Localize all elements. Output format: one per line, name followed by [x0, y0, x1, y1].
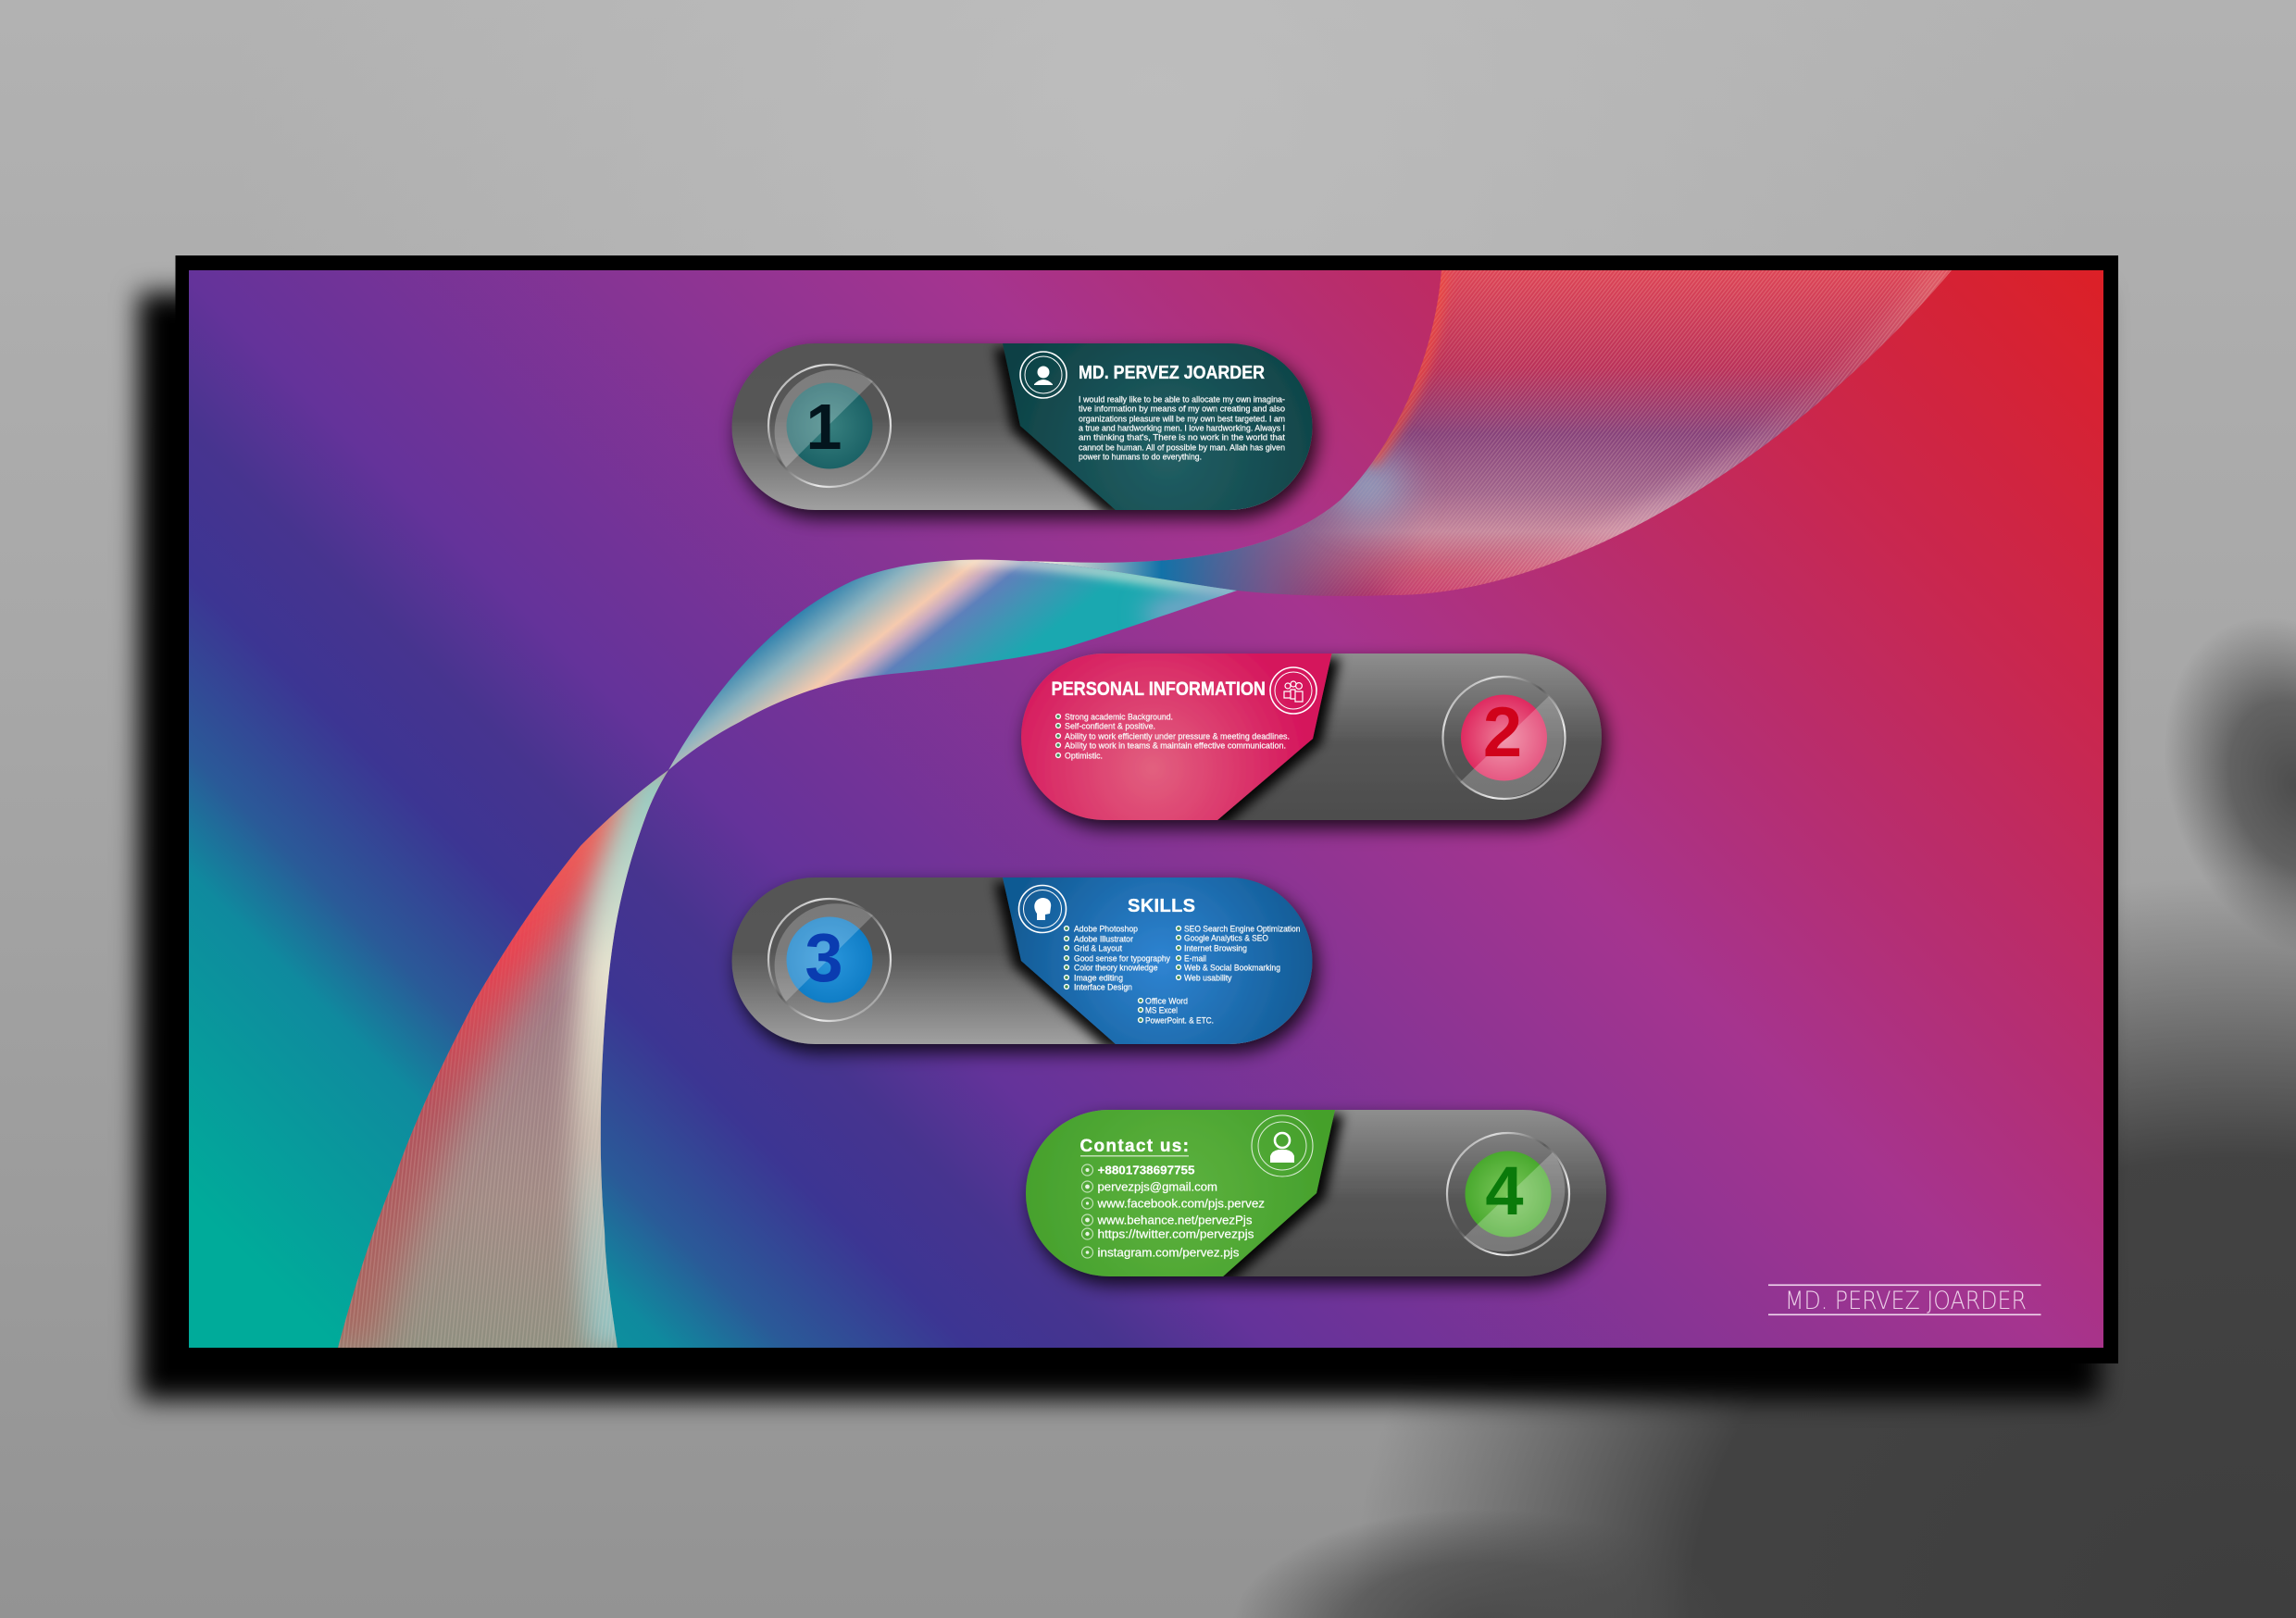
- list: personal traits: Ability to work in teams & maintain effective communication.: [1065, 741, 1286, 752]
- list: marketing skills: Google Analytics & SEO: [1184, 933, 1268, 944]
- list: contact details: www.behance.net/pervezPjs: [1096, 1213, 1253, 1227]
- number badge 1: 1: [806, 391, 842, 463]
- list: personal traits: Ability to work efficiently under pressure & meeting deadlines.: [1065, 731, 1290, 742]
- pill 4: contact: [1014, 1110, 1606, 1276]
- list: personal traits: Self-confident & positive.: [1065, 722, 1155, 731]
- pill 2 grey body: [1021, 653, 1602, 820]
- list: contact details: https://twitter.com/pervezpjs: [1098, 1227, 1254, 1240]
- list: office skills: MS Excel: [1145, 1005, 1178, 1016]
- profile paragraph: cannot be human. All of possible by man. Allah has given: [1079, 442, 1285, 454]
- list: contact details: instagram.com/pervez.pjs: [1098, 1246, 1240, 1259]
- profile paragraph: a true and hardworking men. I love hardworking. Always I: [1079, 424, 1285, 433]
- list: contact details: www.facebook.com/pjs.pervez: [1096, 1196, 1265, 1211]
- list: personal traits: Strong academic Background.: [1065, 713, 1173, 722]
- list: marketing skills: [1177, 924, 1300, 983]
- pill 2: personal information: [1009, 653, 1602, 820]
- list: design skills: [1065, 924, 1170, 992]
- icon: user: [1020, 352, 1067, 398]
- icon: people: [1270, 667, 1316, 714]
- list: personal traits: Optimistic.: [1065, 752, 1103, 761]
- list: marketing skills: SEO Search Engine Optimization: [1184, 924, 1300, 935]
- list: contact details: [1081, 1163, 1265, 1259]
- profile paragraph: power to humans to do everything.: [1079, 452, 1202, 463]
- list: marketing skills: Internet Browsing: [1184, 944, 1247, 953]
- number badge 3: [768, 899, 891, 1021]
- flowing ribbon: lower left fan: [324, 759, 676, 1351]
- pill 1 grey body: [731, 343, 1313, 510]
- list: marketing skills: E-mail: [1184, 953, 1206, 965]
- pill 3: skills: [731, 877, 1324, 1044]
- list: design skills: Grid & Layout: [1074, 944, 1122, 953]
- profile paragraph: [1079, 394, 1285, 463]
- list: design skills: Color theory knowledge: [1074, 963, 1157, 974]
- list: office skills: Office Word: [1145, 996, 1188, 1007]
- flowing ribbon: centre band: [668, 559, 1237, 770]
- title: skills: SKILLS: [1128, 896, 1195, 916]
- number badge 3: 3: [805, 919, 843, 996]
- pill 3 grey body: [731, 877, 1313, 1044]
- list: personal traits: [1056, 713, 1290, 761]
- list: marketing skills: Web & Social Bookmarking: [1184, 963, 1280, 974]
- list: design skills: Image editing: [1074, 974, 1123, 983]
- title: name: MD. PERVEZ JOARDER: [1079, 363, 1265, 383]
- gradient artwork background: [189, 270, 2103, 1348]
- frame shadow: [139, 292, 2100, 1400]
- pill 4 grey body: [1026, 1110, 1606, 1276]
- profile paragraph: am thinking that's, There is no work in the world that: [1079, 433, 1285, 442]
- list: design skills: Adobe Photoshop: [1074, 924, 1138, 935]
- black picture frame: [176, 255, 2118, 1363]
- pill 4 green panel: [1014, 1110, 1335, 1276]
- number badge 1: [768, 365, 891, 487]
- list: office skills: [1139, 996, 1214, 1026]
- number badge 2: [1442, 677, 1565, 799]
- list: contact details: +8801738697755: [1098, 1163, 1194, 1177]
- pill 3 blue panel: [1003, 877, 1324, 1044]
- pill 2 pink panel: [1009, 653, 1331, 820]
- icon: head: [1018, 885, 1067, 933]
- list: marketing skills: Web usability: [1184, 974, 1232, 983]
- title: contact us: Contact us:: [1079, 1137, 1189, 1156]
- signature watermark: MD. PERVEZ JOARDER: [1785, 1287, 2027, 1315]
- number badge 4: 4: [1485, 1152, 1524, 1229]
- title: personal information: PERSONAL INFORMATION: [1052, 678, 1266, 700]
- icon: contact person: [1252, 1115, 1313, 1176]
- profile paragraph: organizations pleasure will be my own best targeted. I am: [1079, 415, 1285, 424]
- number badge 2: 2: [1483, 693, 1522, 772]
- pill 1 teal panel: [1003, 343, 1324, 510]
- list: office skills: PowerPoint. & ETC.: [1145, 1016, 1214, 1026]
- pill 1: profile: [731, 343, 1324, 510]
- list: design skills: Interface Design: [1074, 983, 1132, 992]
- profile paragraph: I would really like to be able to allocate my own imagina-: [1079, 394, 1285, 405]
- flowing ribbon: right wave: [1009, 270, 1963, 604]
- list: design skills: Good sense for typography: [1074, 953, 1170, 965]
- profile paragraph: tive information by means of my own creating and also: [1079, 404, 1285, 415]
- number badge 4: [1447, 1133, 1569, 1255]
- list: design skills: Adobe Illustrator: [1074, 935, 1133, 944]
- list: contact details: pervezpjs@gmail.com: [1098, 1179, 1217, 1194]
